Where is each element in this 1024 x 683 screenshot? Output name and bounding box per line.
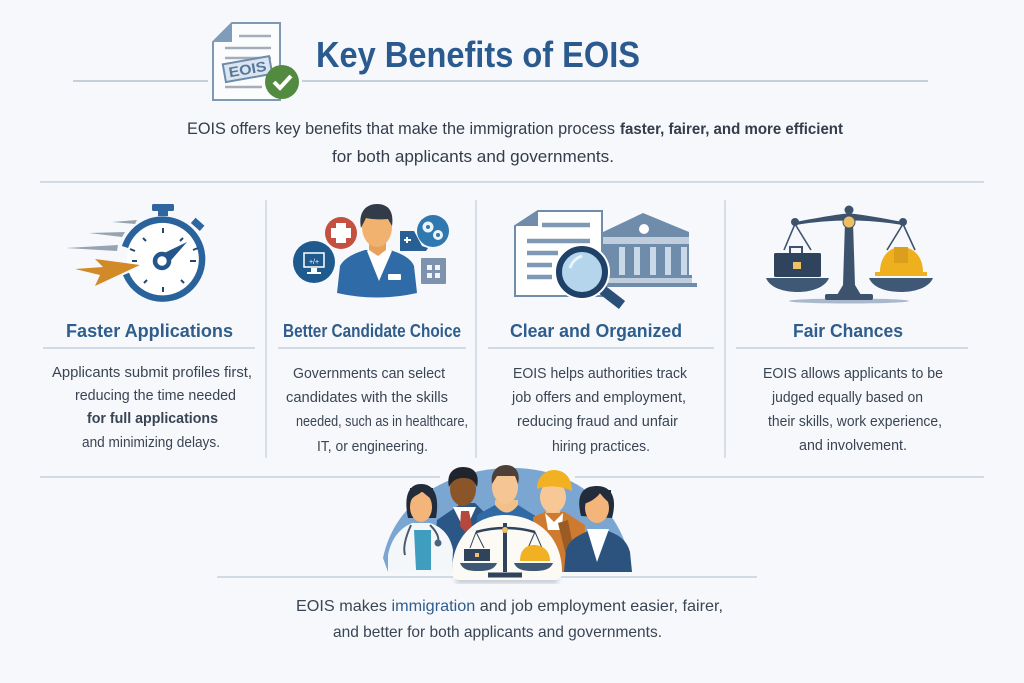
- text: Clear and Organized body: [511, 365, 687, 455]
- intro text: EOIS offers key benefits that make the immigration process: [187, 120, 615, 138]
- heading: Better Candidate Choice: Better Candidate Choice: [283, 321, 461, 341]
- closing statement: [296, 598, 723, 641]
- person: construction worker: [533, 470, 585, 572]
- text: Clear and Organized body: reducing fraud and unfair: [517, 413, 678, 430]
- icon: balance scales with briefcase and hard hat: [766, 206, 933, 304]
- icon: EOIS document with check mark: [213, 23, 299, 100]
- text: Fair Chances body: [763, 365, 943, 454]
- badge: mini scales: [452, 515, 562, 583]
- text: Clear and Organized body: job offers and employment,: [511, 389, 686, 406]
- text: Better Candidate Choice body: candidates with the skills: [286, 389, 448, 406]
- icon: stopwatch: [66, 204, 204, 299]
- text: Faster Applications body: reducing the time needed: [75, 387, 236, 404]
- text: Better Candidate Choice body: IT, or engineering.: [317, 438, 428, 455]
- intro text: faster, fairer, and more efficient: [620, 121, 843, 138]
- heading: Clear and Organized: Clear and Organized: [510, 321, 682, 341]
- icon: skilled professional: [293, 204, 449, 298]
- closing statement: EOIS makes immigration and job employment easier, fairer,: [296, 598, 723, 615]
- text: Fair Chances body: their skills, work experience,: [768, 413, 942, 430]
- person: man in blue sweater: [475, 465, 540, 572]
- text: Faster Applications body: [52, 364, 252, 451]
- person: businesswoman: [564, 486, 632, 572]
- heading: Fair Chances: Fair Chances: [793, 321, 903, 341]
- text: Clear and Organized body: EOIS helps authorities track: [513, 365, 687, 382]
- text: Fair Chances body: judged equally based on: [771, 389, 923, 406]
- person: suited man: [432, 467, 500, 572]
- text: Faster Applications body: Applicants submit profiles first,: [52, 364, 252, 381]
- text: Clear and Organized body: hiring practices.: [552, 438, 650, 455]
- person: doctor: [388, 484, 453, 572]
- text: Fair Chances body: EOIS allows applicants to be: [763, 365, 943, 382]
- text: Faster Applications body: and minimizing delays.: [82, 434, 220, 451]
- closing statement: and better for both applicants and governments.: [333, 624, 662, 641]
- illustration: group of workers with scales: [383, 465, 632, 583]
- intro text: [187, 120, 843, 166]
- text: Better Candidate Choice body: [286, 365, 468, 455]
- icon: document, magnifier and government building: [515, 211, 697, 305]
- icon: EOIS document with check mark: EOIS: [227, 58, 268, 80]
- text: Faster Applications body: for full applications: [87, 410, 218, 427]
- text: Fair Chances body: and involvement.: [799, 437, 907, 454]
- text: Better Candidate Choice body: needed, such as in healthcare,: [296, 413, 468, 430]
- heading: Faster Applications: Faster Applications: [66, 321, 233, 341]
- intro text: for both applicants and governments.: [332, 148, 614, 166]
- title: Key Benefits of EOIS: [316, 34, 640, 75]
- icon: skilled professional: +/+: [309, 259, 319, 266]
- text: Better Candidate Choice body: Governments can select: [293, 365, 446, 382]
